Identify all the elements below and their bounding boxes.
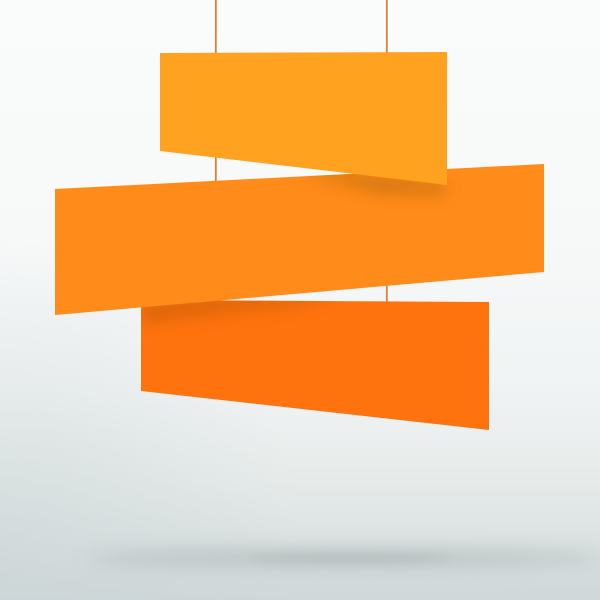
bottom banner [141, 292, 489, 430]
hanging strings [216, 0, 387, 302]
floor shadow [85, 548, 600, 568]
middle banner [55, 164, 544, 315]
top banner [160, 52, 447, 185]
shadow cast by middle banner [141, 300, 318, 326]
shadow cast by top banner [290, 168, 445, 194]
